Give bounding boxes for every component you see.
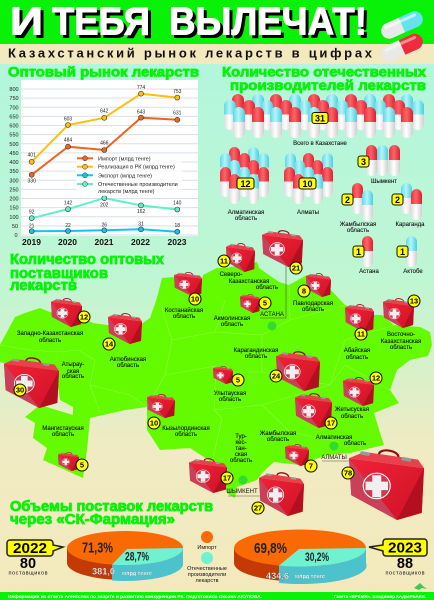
heading: wholesale suppliers: Количество оптовых [10,252,164,268]
supplier case: Abai 11 [345,305,374,340]
region labels: Костанайская [165,307,203,314]
pie chart 2023: млрд тенге [295,574,325,580]
supplier case: Akmola 5: 5 [263,299,267,308]
region labels: область [117,363,139,369]
region labels: область [256,285,278,291]
heading: domestic producers: Количество отечественных [222,64,426,80]
year box 2023: поставщиков [386,570,425,576]
pie chart 2022: 381,0 [92,566,115,578]
series: domestic producers [29,196,182,221]
pie legend: лекарств [195,578,219,584]
year box 2022: 2022 [13,541,47,557]
region labels: Жетысуская [335,407,369,413]
y axis labels: 800 [9,87,19,93]
region labels: Западно-Казахстанская [17,331,83,337]
y axis labels: 100 [9,215,19,221]
pill group: Karaganda 2 [392,183,425,228]
region labels: кес- [235,440,247,446]
region labels: Казахстанская [229,279,269,285]
region labels: Кызылординская [162,426,210,432]
supplier case: Almaty 78: 78 [344,469,352,478]
pie chart 2023: 69,8% [254,540,287,557]
year box 2022: поставщиков [8,570,48,576]
supplier case: Turkestan 17 [189,459,233,493]
pill group: Almaty region 12 [220,147,269,222]
footer: Газета «ВРЕМЯ». Владимир КАДЫРБАЕВ. [334,594,426,599]
year box 2023: 2023 [388,540,422,556]
heading: SK-Pharmacy deliveries: через «СК-Фармация» [10,512,175,528]
heading: wholesale suppliers: поставщиков [10,266,108,282]
series: sales [28,85,182,164]
chart legend [76,154,182,196]
y axis labels: 150 [9,206,19,212]
supplier case: West Kazakhstan 12 [51,299,90,327]
series: import: 466 [100,140,109,146]
pie legend: Отечественные [187,566,227,572]
city marker: Almaty: АЛМАТЫ [321,455,347,461]
y axis labels: 750 [9,96,19,102]
pill group: Almaty 10: Алматы [297,210,319,216]
region labels: Актюбинская [110,357,146,363]
y axis labels: 50 [12,224,18,230]
x axis labels: 2022 [131,237,150,247]
region labels: Тур- [235,434,247,440]
city marker: Astana: АСТАНА [260,312,284,318]
icon: capsules [379,9,425,64]
supplier case: Aktobe 14 [103,314,142,350]
year box 2022: 80 [20,556,36,572]
region labels: область [346,355,368,361]
series: domestic producers: 142 [64,200,72,206]
supplier case: Pavlodar 8: 8 [302,287,306,296]
pill group: Shymkent 3 [358,145,400,185]
region labels: Атырау- [62,362,84,368]
pie chart 2022 [67,531,183,581]
supplier case: Almaty region 17 [295,394,337,429]
pie chart 2023: 30,2% [305,552,329,564]
title: И [13,4,46,46]
y axis labels: 0 [14,233,18,239]
supplier case: Turkestan 17: 17 [223,474,231,483]
supplier case: Zhetysu 12 [343,372,382,406]
supplier case: Karaganda 24 [270,352,320,391]
series: export: 21 [29,224,35,230]
region labels: область [62,374,84,380]
series: export: 31 [138,222,144,228]
pill group: Almaty region 12: Алматинская [228,210,264,216]
pill group: total 31: 31 [315,113,325,123]
pie chart 2022: 71,3% [82,540,113,556]
pill group: Almaty 10: 10 [302,179,313,189]
pill group: Almaty region 12: 12 [240,179,251,189]
footer [0,592,434,600]
city marker: Shymkent: ШЫМКЕНТ [226,489,258,495]
pill group: Almaty region 12: область [235,216,257,222]
pie chart 2022: 28,7% [125,552,149,564]
title: И [10,0,43,44]
series: import [28,110,182,184]
supplier case: Kyzylorda 10: 10 [150,419,158,428]
city marker: Shymkent [226,476,266,496]
series: import: 643 [137,110,145,116]
supplier case: Kostanay 10: 10 [191,295,199,304]
supplier case: Shymkent 27 [252,473,304,516]
x axis labels: 2019 [22,237,41,247]
region labels: Восточно- [387,332,415,338]
title [10,0,370,46]
series: export [29,222,180,234]
chart legend: лекарств (млрд тенге) [98,189,155,195]
pill group: Aktobe 1 [397,236,423,275]
supplier case: Zhetysu 12: 12 [372,374,380,383]
y axis labels: 200 [9,196,19,202]
supplier case: Almaty region 17: 17 [327,419,335,428]
region labels: область [173,314,195,320]
region labels: область [175,432,197,438]
region labels: Северо- [220,272,242,278]
pill group: total 31: Всего в Казахстане [293,141,348,147]
pie chart 2023 [234,530,367,584]
region labels: Казахстанская [381,339,421,345]
supplier case: Kostanay 10 [174,272,202,305]
series: domestic producers: 162 [137,209,145,215]
heading: domestic producers: производителей лекарств [230,77,426,93]
supplier case: Ulytau 5 [213,366,244,386]
region labels: Улытауская [214,391,246,397]
y axis labels: 700 [9,105,19,111]
series: sales: 642 [100,108,109,114]
region labels: область [267,437,289,443]
region labels: область [302,307,324,313]
supplier case: Pavlodar 8 [298,273,331,297]
supplier case: Astana 21: 21 [292,264,300,273]
heading: domestic producers [222,64,426,93]
subtitle band: Казахстанский рынок лекарств в цифрах [8,46,373,60]
series: import: 330 [28,178,36,184]
chart legend: Экспорт (млрд тенге) [98,173,152,179]
pie chart 2023: 434,6 [266,571,289,582]
x axis labels: 2021 [95,237,114,247]
region labels: область [230,458,252,464]
supplier case: Mangystau 5 [58,452,88,471]
supplier case: Mangystau 5: 5 [80,461,84,470]
pill group: Astana 1: Астана [359,269,379,275]
region labels: Абайская [344,347,370,354]
y axis labels: 650 [9,114,19,120]
region labels: область [52,432,74,438]
y axis labels: 550 [9,133,19,139]
region labels: Жамбылская [260,431,296,437]
region labels: область [390,345,412,351]
series: domestic producers: 202 [100,202,109,208]
supplier case: Ulytau 5: 5 [236,376,240,385]
pill group: Zhambyl region 2: область [347,228,369,234]
y axis labels: 450 [9,151,19,157]
chart legend: Реализация в РК (млрд тенге) [98,165,175,171]
supplier case: Kyzylorda 10 [147,394,175,429]
pill group: Karaganda 2: 2 [395,195,400,205]
supplier case: East Kazakhstan 13: 13 [410,297,418,306]
supplier case: North Kazakhstan 11 [218,244,255,272]
pill group: Shymkent 3: 3 [361,157,366,167]
series: sales: 774 [137,85,145,91]
supplier case: Zhambyl 7 [285,444,317,472]
region labels: ская [67,369,79,375]
pill group: Aktobe 1: 1 [400,247,405,257]
y axis labels: 350 [9,169,19,175]
supplier case: Astana 21 [262,231,303,274]
footer: Информация из отчета Агентства по защите и развитию конкуренции РК. Подготовила Оксана АКУЛОВА. [8,593,262,599]
supplier case: Shymkent 27: 27 [254,504,262,513]
supplier case: Karaganda 24: 24 [272,372,281,381]
pill group: Aktobe 1: Актобе [403,269,423,275]
series: sales: 603 [64,116,72,122]
map of Kazakhstan [0,262,432,498]
heading: wholesale suppliers [10,252,164,294]
pill group: Astana 1 [353,236,379,275]
region labels: область [219,397,241,403]
series: domestic producers: 140 [173,200,182,206]
region labels: Акмолинская [214,316,250,322]
region labels: область [344,441,366,447]
y axis labels: 250 [9,187,19,193]
region labels: область [245,354,267,360]
pill group: total 31 [224,94,424,147]
pie legend: производители [188,572,226,578]
y axis labels [9,87,19,239]
supplier case: Almaty 78 [342,450,424,520]
line chart: wholesale market [9,80,198,247]
region labels: ская [235,452,247,458]
pie legend [187,531,227,584]
pie chart 2022: млрд тенге [122,571,152,577]
chart legend: Отечественные производители [98,182,178,188]
supplier case: Zhambyl 7: 7 [309,462,313,471]
supplier case: Akmola 5 [240,294,271,313]
series: export: 22 [65,223,71,229]
header band [0,0,434,46]
pill group: Zhambyl region 2: 2 [345,195,350,205]
year box 2022 [7,540,63,576]
pie legend: Импорт [197,545,217,551]
city marker: Astana [260,255,286,330]
pill group: Almaty 10 [284,153,333,216]
region labels [17,272,421,464]
series: export: 18 [175,223,180,229]
year box 2023 [369,539,427,576]
series: domestic producers: 92 [29,210,35,216]
year box 2023: 88 [397,556,413,572]
title: ТЕБЯ [55,4,153,46]
region labels: Карагандинская [234,348,278,354]
supplier case: Aktobe 14: 14 [105,340,114,349]
series: sales: 401 [28,152,36,158]
pill group: Karaganda 2: Караганда [395,222,425,228]
supplier case: Abai 11: 11 [357,330,365,339]
supplier case: Atyrau 30: 30 [16,386,24,395]
pill group: Shymkent 3: Шымкент [371,179,397,185]
region labels: область [39,338,61,344]
series: sales: 753 [173,89,182,95]
y axis labels: 500 [9,142,19,148]
title: ВЫЛЕЧАТ! [172,4,370,46]
subtitle band [0,44,434,64]
pill group: Zhambyl region 2 [340,183,376,234]
supplier case: North Kazakhstan 11: 11 [220,257,228,266]
supplier case: West Kazakhstan 12: 12 [80,313,88,322]
pill group: Zhambyl region 2: Жамбылская [340,222,376,228]
city marker: Almaty [321,442,360,461]
y axis labels: 400 [9,160,19,166]
icon: logo mark [414,583,427,590]
series: import: 631 [173,110,182,116]
x axis labels: 2020 [58,237,77,247]
region labels: тан- [235,446,247,452]
x axis labels [22,237,187,247]
title: ВЫЛЕЧАТ! [169,0,367,44]
title: ТЕБЯ [52,0,150,44]
region labels: Павлодарская [293,301,333,307]
region labels: область [221,322,243,328]
chart legend: Импорт (млрд тенге) [98,156,151,162]
pill group: Astana 1: 1 [356,247,361,257]
x axis labels: 2023 [168,237,187,247]
series: import: 484 [64,138,72,144]
region labels: Алматинская [316,435,352,441]
region labels: область [341,414,363,420]
heading: wholesale suppliers: лекарств [10,278,77,294]
heading: SK-Pharmacy deliveries: Объемы поставок лекарств [10,499,213,515]
region labels: Мангистауская [42,426,84,432]
supplier case: Atyrau 30 [4,358,59,408]
series: export: 26 [102,222,107,228]
y axis labels: 300 [9,178,19,184]
heading: wholesale market: Оптовый рынок лекарств [8,64,199,80]
heading: SK-Pharmacy deliveries [10,499,213,528]
y axis labels: 600 [9,124,19,130]
supplier case: East Kazakhstan 13 [383,295,420,328]
